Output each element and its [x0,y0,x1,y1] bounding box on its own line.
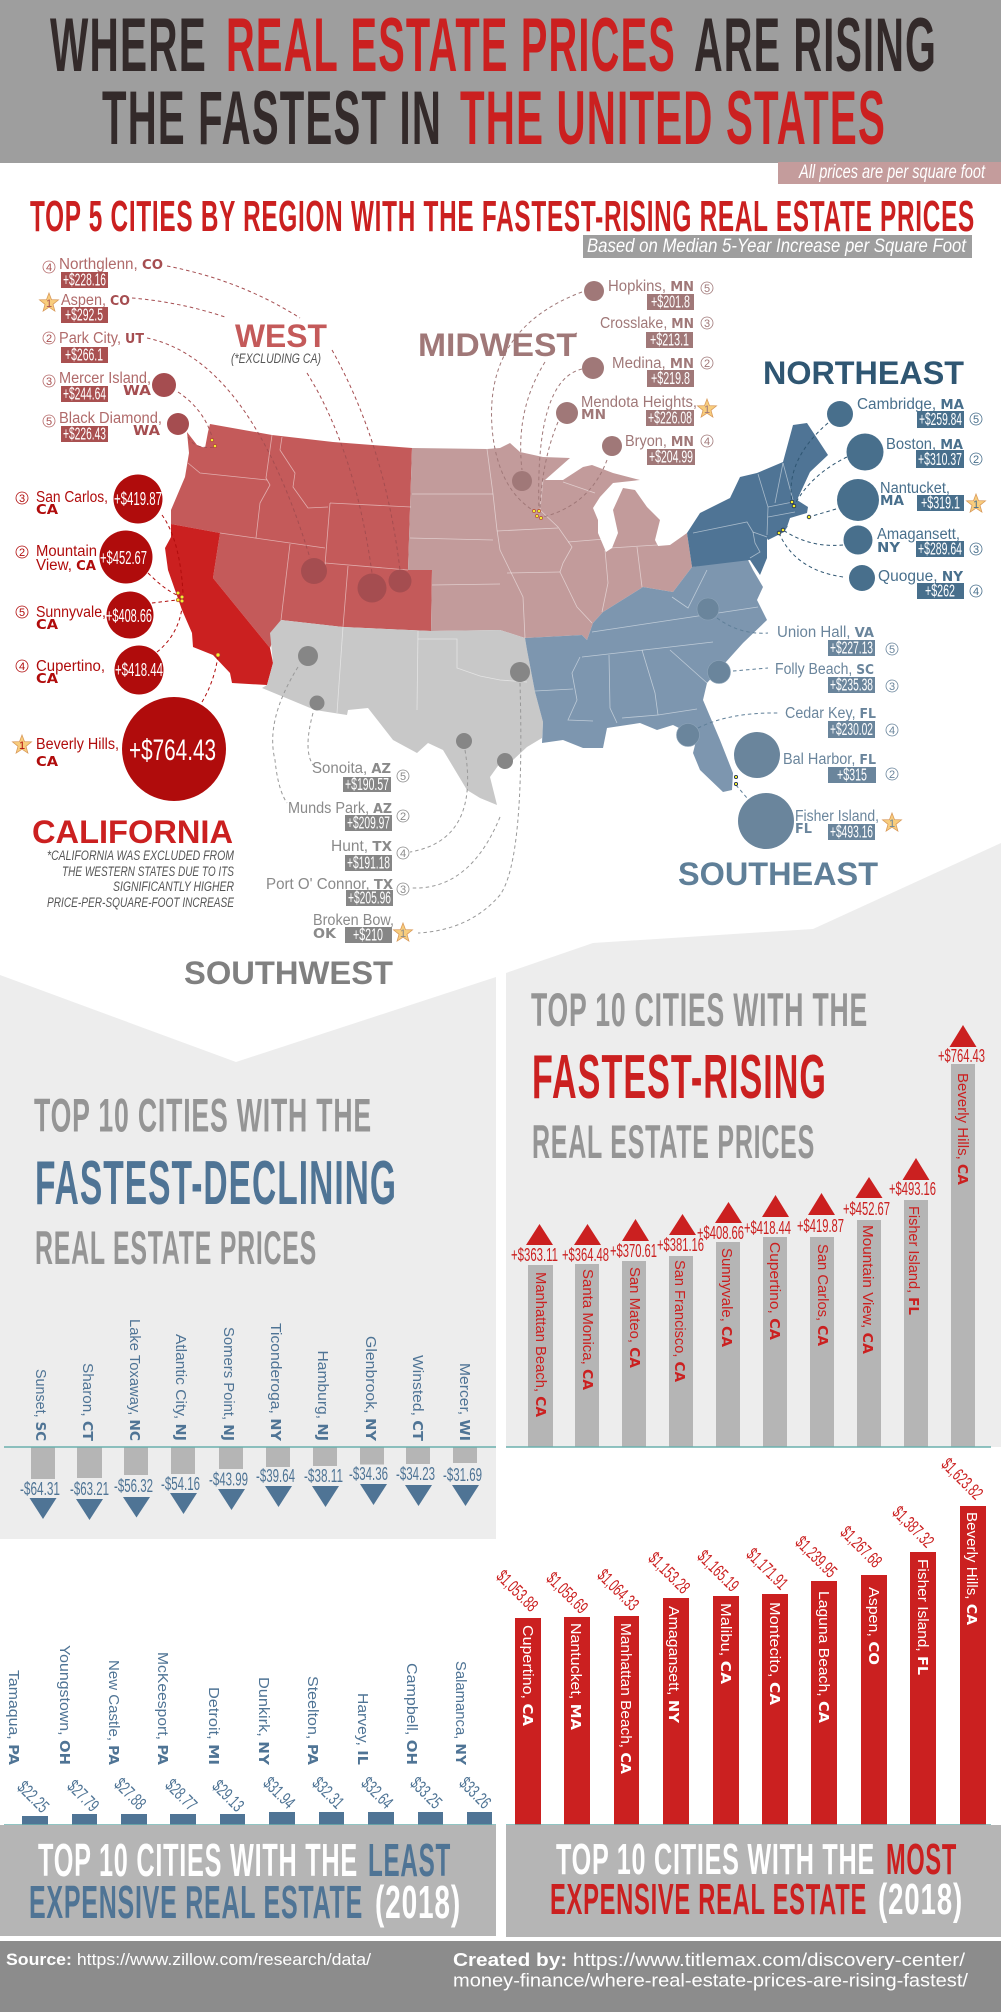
city labels: Ticonderoga, NY [267,1323,283,1441]
city labels: Malibu, CA [717,1603,733,1685]
bars [22,1812,492,1825]
southwest: Munds Park: +$209.97 [347,812,390,832]
region: midwest [408,443,692,640]
title [50,3,937,161]
values: $1,053.88 [492,1566,542,1616]
southeast: Folly Beach: 3 [889,681,895,693]
southeast: Cedar Key: Cedar Key, FL [785,705,876,722]
southeast: Bal Harbor: +$315 [837,764,867,784]
values: +$363.11 [511,1245,558,1265]
midwest: Medina: 2 [704,358,710,370]
california: Mountain View: 2 [19,547,25,559]
city labels: Cupertino, CA [519,1625,535,1727]
west: Aspen: Aspen, CO [61,292,130,309]
values: -$63.21 [70,1479,109,1499]
bars [515,1506,986,1825]
city labels [532,1073,970,1418]
bars [31,1447,477,1479]
northeast: Boston: +$310.37 [918,449,962,469]
northeast: Amagansett [844,526,982,558]
city labels: Mercer, WI [456,1363,472,1441]
southwest: Broken Bow: Broken Bow, [313,912,394,929]
southeast: Cedar Key: +$230.02 [830,719,873,739]
west: Mercer Island: WA [123,383,152,399]
midwest: Crosslake: +$213.1 [650,330,689,350]
northeast: Boston: Boston, MA [886,436,964,453]
california: Beverly Hills: CA [36,754,59,770]
midwest: Bryon: +$204.99 [649,446,693,466]
southwest: Port O' Connor: Port O' Connor, TX [266,876,394,893]
region: southwest [262,620,543,805]
values [13,1773,495,1817]
california: San Carlos: CA [36,502,59,518]
city labels: Campbell, OH [403,1663,419,1765]
west: Mercer Island [43,370,176,404]
southwest: Hunt: Hunt, TX [331,838,393,855]
city labels [519,1512,979,1775]
city labels: Tamaqua, PA [5,1670,21,1766]
values [20,1464,482,1499]
northeast: Cambridge [827,396,982,429]
city labels: Laguna Beach, CA [815,1591,831,1724]
chart: least expensive [4,1645,496,1825]
southeast: Cedar Key [785,705,898,739]
california: Sunnyvale: CA [36,617,59,633]
midwest: Hopkins: 5 [704,283,710,295]
values: $27.79 [63,1776,103,1816]
northeast: Cambridge: +$259.84 [919,409,962,429]
southeast: Fisher Island: 1 [889,818,895,830]
values: -$34.36 [349,1464,388,1484]
california heading and note: CALIFORNIA [32,814,233,850]
southeast: Folly Beach: Folly Beach, SC [775,661,874,678]
values: $1,239.95 [791,1532,841,1582]
location dots [176,438,543,657]
values: +$493.16 [889,1179,936,1199]
bars [528,1064,975,1447]
credit [453,1950,968,1990]
southwest: Port O' Connor [266,876,409,908]
heading panel: least expensive: (2018) [375,1876,461,1928]
midwest: Bryon: 4 [704,436,710,448]
california: San Carlos: +$419.87 [114,489,162,509]
california heading and note: THE WESTERN STATES DUE TO ITS [62,864,234,879]
west: Black Diamond: WA [133,423,161,439]
heading: fastest-declining: FASTEST-DECLINING [35,1149,397,1218]
southwest: Broken Bow: +$210 [353,924,383,944]
california: Sunnyvale [16,592,154,638]
city labels: Dunkirk, NY [255,1677,271,1765]
california: Cupertino: 4 [19,661,25,673]
city labels: Aspen, CO [865,1587,881,1665]
city labels: Santa Monica, CA [579,1269,595,1391]
values: +$408.66 [697,1223,744,1243]
california heading and note: PRICE-PER-SQUARE-FOOT INCREASE [47,895,235,910]
city labels: Manhattan Beach, CA [617,1623,633,1775]
northeast: Nantucket: +$319.1 [921,492,960,512]
values: +$452.67 [843,1199,890,1219]
southeast: Union Hall: 5 [889,644,895,656]
west: Black Diamond: +$226.43 [63,424,106,444]
california: Sunnyvale: Sunnyvale, [36,604,106,621]
values: $1,171.91 [742,1544,792,1594]
west: Park City: +$266.1 [65,344,103,364]
region label: northeast: NORTHEAST [763,355,964,391]
southwest: Hunt: +$191.18 [347,852,390,872]
background panel: fastest rising [506,843,1001,1447]
west: Mercer Island: +$244.64 [63,384,106,404]
source: Source: https://www.zillow.com/research/data/ [6,1950,371,1969]
heading panel: most expensive [506,1825,1001,1937]
city labels [32,1319,472,1442]
city labels: Hamburg, NJ [314,1350,330,1441]
region label: west: WEST [235,318,327,354]
midwest: Bryon: Bryon, MN [625,433,694,450]
down arrows [30,1484,479,1520]
values: $1,058.69 [542,1568,592,1618]
west: Park City: Park City, UT [59,330,145,347]
up arrows [526,1025,976,1245]
heading panel: least expensive [0,1825,496,1936]
city labels: San Francisco, CA [671,1260,687,1383]
northeast: Nantucket [837,479,986,521]
midwest: Crosslake: 3 [704,318,710,330]
city labels: New Castle, PA [105,1660,121,1766]
values: +$370.61 [610,1241,657,1261]
city labels: Sunnyvale, CA [718,1248,734,1348]
background panel: fastest declining [0,975,496,1539]
southwest: Munds Park [288,800,409,832]
city labels: Amagansett, NY [665,1606,681,1723]
west: Park City: 2 [46,333,52,345]
midwest: Hopkins: +$201.8 [651,292,690,312]
city labels: Detroit, MI [205,1687,221,1765]
california heading and note: *CALIFORNIA WAS EXCLUDED FROM [47,848,235,863]
california: San Carlos: San Carlos, [36,489,108,506]
values: -$34.23 [396,1464,435,1484]
midwest: Medina: Medina, MN [612,355,694,372]
california heading and note: SIGNIFICANTLY HIGHER [113,879,234,894]
california: Beverly Hills [12,697,226,801]
values: $1,153.28 [644,1548,694,1598]
midwest: Medina [582,355,713,388]
city labels: Sunset, SC [32,1369,48,1441]
chart: fastest-rising [506,1025,991,1447]
california: Cupertino [16,646,164,694]
city labels: Cupertino, CA [766,1242,782,1341]
city labels: Fisher Island, FL [914,1559,930,1675]
city labels: Harvey, IL [354,1693,370,1765]
west: Mercer Island: 3 [46,376,52,388]
state borders [188,435,795,723]
southwest: Broken Bow [313,912,412,944]
northeast: Amagansett: Amagansett, [877,526,960,543]
city labels: Nantucket, MA [567,1623,583,1731]
values: -$64.31 [20,1479,60,1499]
midwest: Hopkins: Hopkins, MN [608,278,694,295]
california: Sunnyvale: +$408.66 [106,606,152,626]
city labels [5,1645,468,1766]
west: Northglenn: 4 [46,262,52,274]
values: $32.31 [308,1773,348,1813]
region label: west: (*EXCLUDING CA) [231,351,321,366]
city labels: San Carlos, CA [814,1244,830,1347]
midwest: Mendota Heights [556,394,716,428]
west: Northglenn: Northglenn, CO [59,256,163,273]
city labels: Beverly Hills, CA [963,1512,979,1626]
title: WHERE [50,3,207,88]
northeast: Cambridge: Cambridge, MA [857,396,965,413]
southwest: Port O' Connor: 3 [400,884,406,896]
city labels: Winsted, CT [409,1355,425,1442]
heading: fastest-rising [531,983,868,1168]
city labels: Sharon, CT [79,1363,95,1442]
heading panel: least expensive: TOP 10 CITIES WITH THE [38,1834,358,1886]
southwest: Port O' Connor: +$205.96 [348,888,391,908]
values: +$364.48 [562,1245,609,1265]
city labels: Beverly Hills, CA [954,1073,970,1186]
west: Aspen: 1 [46,298,52,310]
northeast: Boston [846,434,982,470]
region label: southwest: SOUTHWEST [184,955,393,991]
values: -$31.69 [443,1465,482,1485]
header banner [0,0,1001,163]
values: $1,165.19 [693,1546,743,1596]
region: california [165,524,273,685]
city labels: Glenbrook, NY [362,1336,378,1441]
values: +$418.44 [744,1218,791,1238]
southeast: Union Hall: Union Hall, VA [777,624,875,641]
northeast: Nantucket: 1 [973,499,979,511]
midwest: Mendota Heights: 1 [704,404,710,416]
values: -$56.32 [114,1476,153,1496]
southeast: Bal Harbor: 2 [889,769,895,781]
connector lines [132,266,847,933]
midwest: Bryon [602,433,713,466]
southwest: Hunt [331,838,409,872]
southeast: Cedar Key: 4 [889,725,895,737]
california: San Carlos [16,474,162,524]
values: -$43.99 [209,1470,248,1490]
northeast: Quogue: Quogue, NY [878,568,963,585]
city labels: McKeesport, PA [154,1652,170,1766]
midwest: Mendota Heights: +$226.08 [648,408,692,428]
northeast: Quogue: +$262 [925,580,955,600]
midwest: Crosslake: Crosslake, MN [600,315,694,332]
california: Cupertino: +$418.44 [115,660,163,680]
heading: fastest-declining [34,1088,397,1274]
southeast: Folly Beach: +$235.38 [830,674,873,694]
region: southeast [525,558,767,792]
northeast: Quogue: 4 [973,586,979,598]
map of the United States [165,423,828,805]
chart: fastest-declining [4,1319,496,1520]
map bubbles [298,471,730,769]
west: Park City [43,330,145,364]
northeast: Amagansett: +$289.64 [918,538,962,558]
credit: money-finance/where-real-estate-prices-are-rising-fastest/ [453,1970,968,1990]
values: -$54.16 [161,1474,200,1494]
southeast: Fisher Island [738,793,902,849]
heading: fastest-declining: REAL ESTATE PRICES [35,1221,317,1274]
chart: most expensive [492,1454,991,1825]
west: Black Diamond: 5 [46,416,52,428]
location dots: east coast [734,500,811,786]
california: Mountain View: View, CA [36,557,97,574]
region label: midwest: MIDWEST [418,327,577,363]
southeast: Fisher Island: +$493.16 [830,822,873,842]
northeast: Nantucket: Nantucket, [880,480,950,497]
values: -$38.11 [304,1466,343,1486]
values: +$419.87 [797,1216,844,1236]
midwest: Hopkins [584,278,713,312]
southeast: Union Hall [777,624,898,658]
california: Mountain View [16,530,152,584]
west: Black Diamond: Black Diamond, [59,410,162,427]
heading panel: least expensive: LEAST [368,1834,451,1886]
city labels: Manhattan Beach, CA [532,1272,548,1418]
values: -$39.64 [256,1466,295,1486]
california: Beverly Hills: Beverly Hills, [36,736,119,753]
west: Northglenn [43,256,163,290]
west: Aspen: +$292.5 [65,304,103,324]
heading: fastest-declining: TOP 10 CITIES WITH THE [34,1088,372,1142]
california: Beverly Hills: 1 [19,740,25,752]
city labels: Salamanca, NY [452,1661,468,1765]
midwest: Medina: +$219.8 [651,368,690,388]
southeast: Folly Beach [775,661,898,694]
northeast: Amagansett: 3 [973,544,979,556]
northeast: Boston: 2 [973,454,979,466]
midwest: Crosslake [600,315,713,350]
city labels: Mountain View, CA [859,1225,875,1355]
values: $33.25 [406,1773,446,1813]
city labels: Somers Point, NJ [220,1327,236,1441]
values: $1,267.68 [836,1522,886,1572]
california: San Carlos: 3 [19,493,25,505]
midwest: Mendota Heights: MN [581,407,606,423]
city labels: Fisher Island, FL [905,1206,921,1315]
values [511,1046,985,1265]
northeast: Quogue [849,565,982,600]
footer [0,1941,1001,2012]
northeast: Amagansett: NY [877,540,900,556]
california: Cupertino: Cupertino, [36,658,105,675]
title: THE FASTEST IN [102,76,442,161]
california: Beverly Hills: +$764.43 [129,734,216,767]
city labels: San Mateo, CA [626,1267,642,1369]
california: Mountain View: Mountain [36,543,97,560]
southwest: Broken Bow: 1 [400,928,406,940]
southeast: Fisher Island: FL [795,821,812,837]
southeast: Fisher Island: Fisher Island, [795,808,879,825]
city labels: Lake Toxaway, NC [126,1319,142,1441]
northeast: Nantucket: MA [880,493,905,509]
california: Cupertino: CA [36,671,59,687]
values: $1,387.32 [888,1502,938,1552]
southwest: Sonoita: Sonoita, AZ [312,760,391,777]
region label: southeast: SOUTHEAST [678,856,878,892]
southwest: Sonoita: 5 [400,771,406,783]
west: Black Diamond [43,410,189,444]
west: Northglenn: +$228.16 [63,270,106,290]
california: Sunnyvale: 5 [19,607,25,619]
west: Aspen [40,292,130,324]
values: $22.25 [13,1777,53,1817]
city labels: Youngstown, OH [56,1645,72,1765]
southwest: Hunt: 4 [400,848,406,860]
values: $33.26 [455,1773,495,1813]
california heading and note [32,814,235,910]
values: $27.88 [110,1774,150,1814]
heading panel: least expensive: EXPENSIVE REAL ESTATE [29,1876,363,1928]
southwest: Sonoita: +$190.57 [345,774,389,794]
values: $31.94 [259,1773,299,1813]
southeast: Union Hall: +$227.13 [830,638,873,658]
values: $32.64 [357,1773,397,1813]
values [492,1454,987,1618]
region: west [171,424,432,648]
region: northeast [687,423,828,575]
credit: Created by: https://www.titlemax.com/discovery-center/ [453,1950,965,1970]
midwest: Mendota Heights: Mendota Heights, [581,394,697,411]
southwest: Sonoita [312,760,409,794]
california: Mountain View: +$452.67 [100,548,147,568]
values: $1,064.33 [593,1565,643,1615]
city labels: Montecito, CA [766,1602,782,1706]
city labels: Atlantic City, NJ [172,1334,188,1441]
city labels: Steelton, PA [304,1676,320,1766]
values: +$381.16 [657,1235,704,1255]
southwest: Munds Park: 2 [400,811,406,823]
northeast: Cambridge: 5 [973,414,979,426]
values: $29.13 [208,1776,248,1816]
values: $28.77 [161,1775,201,1815]
west: Mercer Island: Mercer Island, [59,370,151,387]
southeast: Bal Harbor [734,732,898,784]
southwest: Munds Park: Munds Park, AZ [288,800,392,817]
southeast: Bal Harbor: Bal Harbor, FL [783,751,876,768]
southwest: Broken Bow: OK [313,926,337,942]
